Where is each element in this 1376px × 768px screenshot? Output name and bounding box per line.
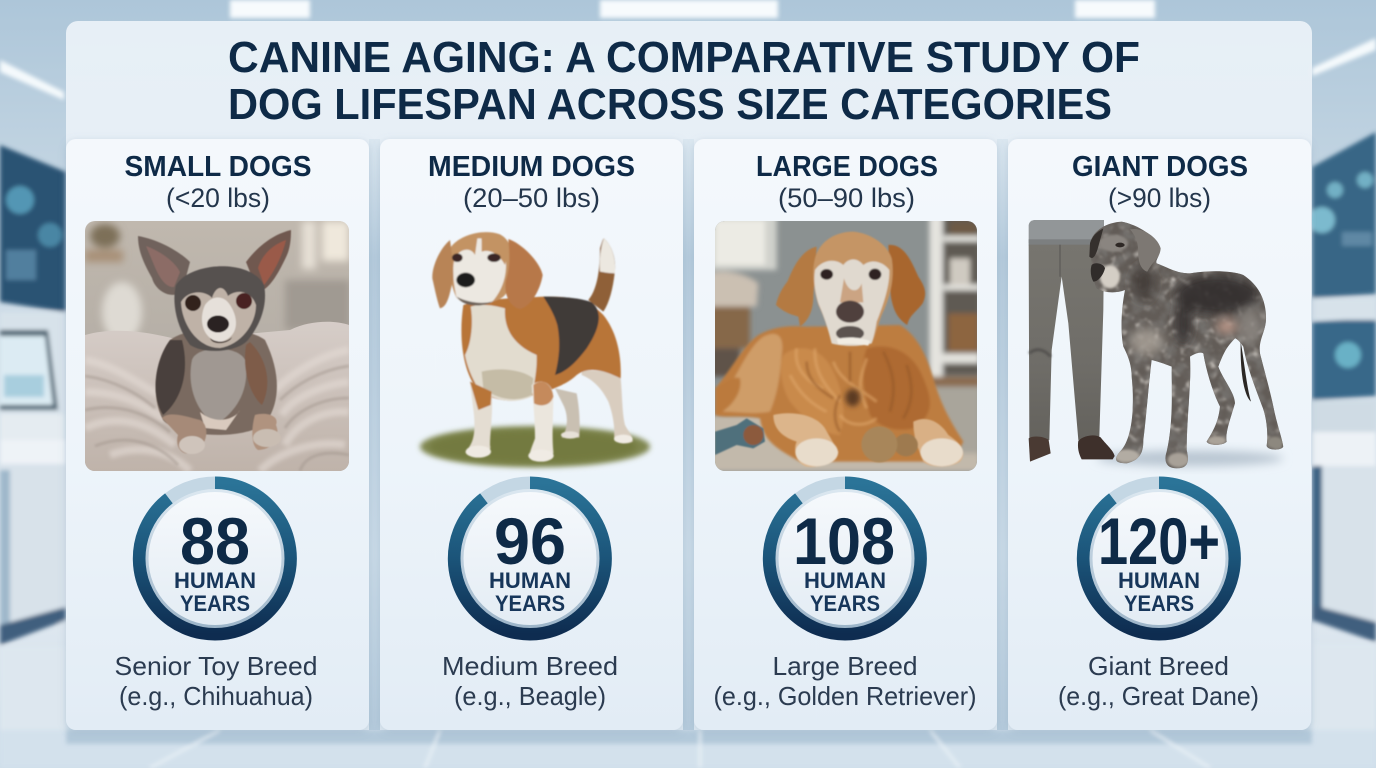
weight range: (20–50 lbs) bbox=[463, 183, 600, 213]
card background bbox=[66, 139, 369, 730]
breed label: Medium Breed bbox=[442, 651, 618, 681]
weight range: (>90 lbs) bbox=[1108, 183, 1211, 213]
lifespan ring: 96: HUMAN bbox=[489, 568, 571, 593]
lifespan ring: 88: 88 bbox=[180, 504, 250, 578]
head bbox=[813, 232, 893, 346]
chest white bbox=[465, 305, 537, 401]
heading: medium dogs: MEDIUM DOGS bbox=[428, 151, 635, 183]
title: DOG LIFESPAN ACROSS SIZE CATEGORIES bbox=[228, 80, 1112, 129]
lifespan ring: 96: 96 bbox=[494, 504, 566, 578]
lifespan ring: 88: YEARS bbox=[180, 591, 250, 616]
left leg and paw bbox=[773, 413, 838, 467]
photo: chihuahua on blanket bbox=[85, 221, 350, 471]
card background bbox=[380, 139, 683, 730]
lifespan ring: 108: 108 bbox=[793, 504, 895, 578]
panel: small dogs bbox=[66, 139, 369, 730]
panel: medium dogs bbox=[380, 139, 683, 730]
illustration: beagle on grass bbox=[420, 232, 650, 467]
near hind leg bbox=[582, 370, 633, 443]
heading: large dogs: LARGE DOGS bbox=[756, 151, 938, 183]
lifespan ring: 120+: HUMAN bbox=[1118, 568, 1200, 593]
lifespan ring: 108: YEARS bbox=[810, 591, 880, 616]
breed label: Giant Breed bbox=[1088, 651, 1229, 681]
panel: large dogs bbox=[694, 139, 1000, 730]
card background bbox=[1008, 139, 1311, 730]
breed label: Senior Toy Breed bbox=[114, 651, 318, 681]
weight range: (<20 lbs) bbox=[166, 183, 270, 213]
dog body bbox=[156, 329, 277, 435]
lifespan ring: 96 bbox=[454, 483, 606, 634]
lifespan ring: 120+ bbox=[1083, 483, 1234, 634]
breed label bbox=[114, 651, 318, 711]
dane head details bbox=[1130, 229, 1161, 272]
right leg and paw bbox=[913, 419, 963, 467]
lifespan ring: 96: YEARS bbox=[495, 591, 565, 616]
head bbox=[174, 266, 265, 351]
lifespan ring: 88: HUMAN bbox=[174, 568, 256, 593]
breed label bbox=[442, 651, 618, 711]
lifespan ring: 88 bbox=[139, 483, 290, 634]
lifespan ring: 108: HUMAN bbox=[804, 568, 886, 593]
weight range: (50–90 lbs) bbox=[778, 183, 915, 213]
ears bbox=[138, 236, 190, 295]
dark saddle bbox=[543, 297, 599, 375]
lifespan ring: 120+: 120+ bbox=[1098, 504, 1220, 578]
breed label: (e.g., Great Dane) bbox=[1058, 681, 1259, 711]
photo: golden retriever in living room bbox=[715, 221, 977, 471]
paws bbox=[466, 446, 491, 458]
title: CANINE AGING: A COMPARATIVE STUDY OF bbox=[228, 33, 1140, 82]
breed label: Large Breed bbox=[772, 651, 918, 681]
breed label: (e.g., Chihuahua) bbox=[119, 681, 313, 711]
body bbox=[715, 325, 963, 462]
person's legs bbox=[1029, 220, 1115, 462]
body bbox=[461, 297, 621, 401]
breed label bbox=[1058, 651, 1259, 711]
card background bbox=[694, 139, 997, 730]
tail bbox=[588, 238, 615, 312]
left toy bone bbox=[715, 418, 765, 455]
front legs bbox=[466, 382, 492, 457]
lifespan ring: 108 bbox=[769, 483, 920, 634]
panel: giant dogs bbox=[1008, 139, 1311, 730]
right toy bbox=[894, 434, 918, 456]
breed label: (e.g., Beagle) bbox=[454, 681, 606, 711]
far hind leg bbox=[555, 388, 580, 438]
title bbox=[228, 33, 1140, 129]
breed label bbox=[714, 651, 976, 711]
breed label: (e.g., Golden Retriever) bbox=[714, 681, 976, 711]
lifespan ring: 120+: YEARS bbox=[1124, 591, 1194, 616]
ears bbox=[776, 247, 817, 327]
head and face bbox=[449, 232, 514, 304]
heading: giant dogs: GIANT DOGS bbox=[1072, 151, 1248, 183]
photo: great dane beside person bbox=[1029, 217, 1290, 473]
dane body bbox=[1083, 217, 1290, 473]
heading: small dogs: SMALL DOGS bbox=[124, 151, 312, 183]
